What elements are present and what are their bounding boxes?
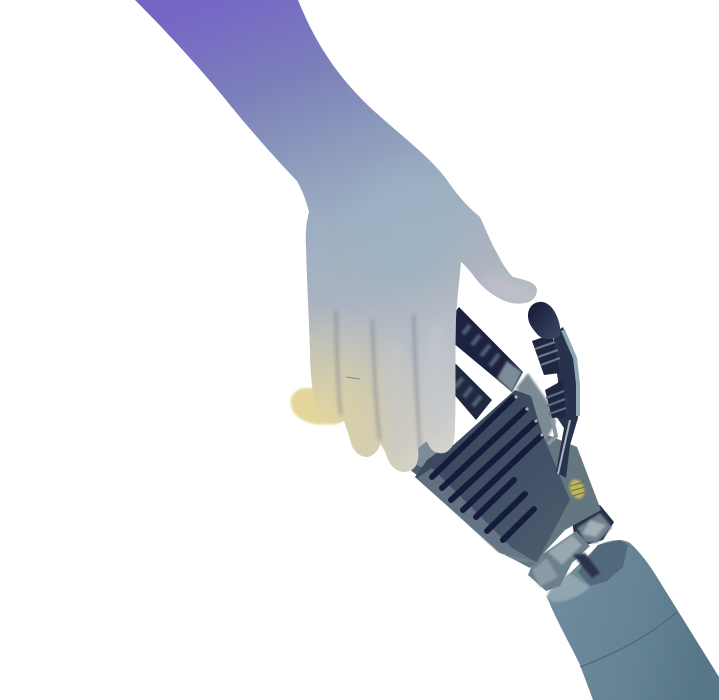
thumb side metal plate — [552, 327, 578, 478]
wrist: metal joints — [528, 505, 614, 591]
thumb upper ribbed joint — [532, 334, 560, 375]
metal wedge: thumb base — [516, 373, 556, 442]
hand silhouette — [130, 0, 550, 480]
thumb fingertip — [528, 302, 560, 339]
palm: robot hand back plate — [415, 390, 570, 562]
thumb lower ribbed joint — [545, 380, 566, 418]
palm screws — [514, 395, 544, 437]
forearm: robotic arm cylinder — [547, 540, 719, 700]
robot finger: lower — [446, 362, 492, 420]
robot finger: upper — [440, 307, 523, 392]
wrist block behind palm — [505, 433, 601, 568]
knuckle wrinkle — [346, 377, 360, 379]
palm slots — [432, 398, 541, 540]
human arm and hand — [130, 0, 550, 480]
finger creases — [336, 310, 420, 447]
light neck ring — [547, 573, 590, 602]
robot finger: behind hand — [370, 325, 446, 476]
yellow fingertip — [291, 388, 345, 425]
robot thumb — [528, 302, 578, 478]
icon: yellow coil — [567, 477, 587, 501]
arm socket opening — [578, 540, 628, 586]
